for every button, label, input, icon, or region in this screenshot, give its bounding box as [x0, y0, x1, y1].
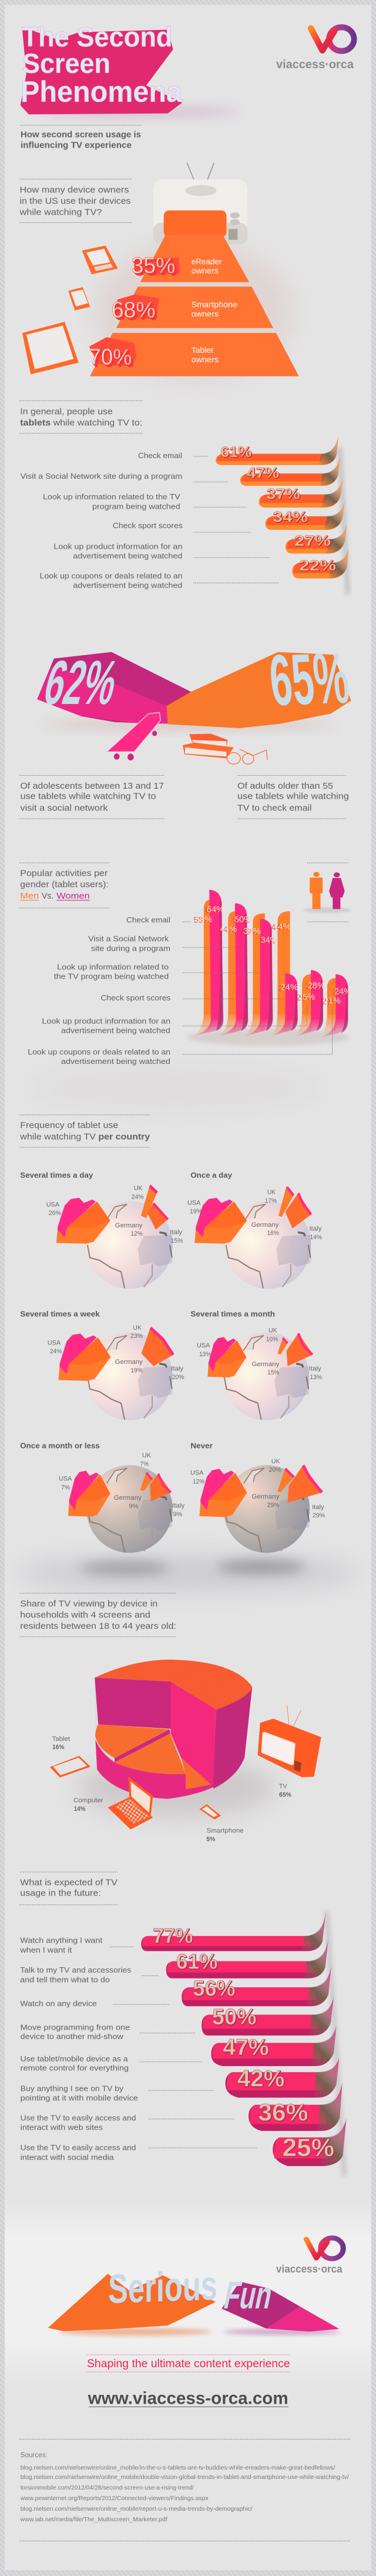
caption: adults: Of adults older than 55	[237, 781, 333, 791]
future usage percentages: 61%	[176, 1949, 217, 1973]
heading: device owners question: How many device owners	[20, 185, 129, 195]
globe panel: several times a day	[20, 1170, 183, 1289]
list: tablet activities: advertisement being watched	[73, 552, 182, 560]
list: future TV usage: and tell them what to do	[20, 1975, 110, 1984]
bar percentages: 47%	[247, 465, 279, 482]
globe panel: never: 20%	[269, 1466, 281, 1473]
heading: share of TV viewing: residents between 18 to 44 years old:	[20, 1621, 176, 1631]
globe panel: several times a week: USA	[48, 1339, 61, 1346]
globe panel: once a month or less	[20, 1441, 185, 1553]
list: gender activities: Look up product information for an	[42, 1016, 170, 1025]
subtitle: influencing TV experience	[21, 141, 132, 151]
globe panel: several times a week: 19%	[130, 1367, 143, 1374]
globe panel: several times a month: 13%	[310, 1374, 322, 1381]
list: tablet activities: Look up product information for an	[53, 542, 182, 551]
icon: books and glasses	[183, 733, 267, 764]
globe panel: never: Germany	[251, 1493, 280, 1500]
bar chart: men vs women	[187, 890, 351, 1046]
globe panel: once a month or less: 7%	[61, 1484, 70, 1491]
list: tablet activities: Look up coupons or deals related to an	[40, 572, 182, 580]
future usage percentages	[153, 1924, 334, 2162]
3D stats: 62% and 65%	[37, 637, 352, 764]
list: gender activities	[28, 915, 171, 1066]
pie walls	[95, 1678, 252, 1799]
list: tablet activities: Check email	[138, 451, 182, 460]
list: gender activities: advertisement being watched	[61, 1057, 170, 1066]
globe panel: once a month or less: USA	[59, 1476, 72, 1483]
title: The Second Screen Phenomena	[21, 21, 183, 114]
heading: activities per gender: gender (tablet users):	[20, 880, 109, 890]
globe panel: once a day: 14%	[310, 1234, 322, 1241]
sources: www.iab.net/media/file/The_Multiscreen_Marketer.pdf	[20, 2516, 167, 2523]
globe panel: several times a month: Several times a month	[190, 1309, 275, 1318]
pie labels	[52, 1736, 291, 1843]
list: gender activities: the TV program being watched	[54, 972, 169, 981]
future usage percentages: 42%	[237, 2066, 284, 2091]
icon: smartphone	[68, 287, 90, 311]
bar percentages by gender: 28%	[308, 981, 325, 991]
list: future TV usage: Talk to my TV and accessories	[20, 1966, 132, 1974]
bar chart: pink ribbons	[141, 1911, 347, 2176]
heading: TV usage in the future	[20, 1878, 118, 1898]
pie labels: 5%	[206, 1836, 215, 1843]
pie labels: 16%	[52, 1744, 65, 1751]
list: future TV usage: Watch anything I want	[20, 1936, 103, 1945]
caption: adults	[237, 781, 349, 813]
bar percentages by gender: 24%	[280, 982, 298, 993]
pyramid labels: Tablet	[192, 345, 213, 355]
bar percentages by gender: 34%	[261, 935, 277, 945]
globe panel: once a day: Italy	[309, 1226, 322, 1233]
heading: tablets while watching TV	[20, 407, 142, 428]
globe panel: several times a week: 23%	[130, 1333, 143, 1340]
globe shadows	[80, 1560, 306, 1575]
caption: adolescents	[20, 781, 164, 813]
list: future TV usage: Watch on any device	[20, 1999, 97, 2008]
pie chart: share of TV viewing	[50, 1660, 321, 1843]
globe panel: once a day: 17%	[265, 1197, 277, 1204]
3D stats: 62% and 65%: 62%	[38, 648, 125, 718]
pie labels: TV	[279, 1783, 287, 1790]
bar percentages by gender: 50%	[234, 915, 251, 925]
future usage percentages: 50%	[212, 2005, 256, 2030]
globe panel: never: USA	[190, 1470, 204, 1477]
bar percentages by gender: 24%	[334, 986, 351, 996]
logo: viaccess-orca top: viaccess·orca	[276, 58, 354, 71]
list: future TV usage: Move programming from one	[21, 2023, 130, 2031]
globe panel: once a month or less: Germany	[114, 1494, 142, 1501]
pyramid labels: Smartphone	[192, 300, 237, 309]
icon: smartphone	[199, 1804, 221, 1820]
sources: Sources:	[21, 2451, 48, 2459]
sources	[20, 2451, 349, 2523]
heading: activities per gender: Women	[56, 891, 90, 901]
bar percentages by gender: 58%	[195, 915, 212, 925]
TV slice 65%	[95, 1660, 252, 1710]
title: The Second Screen Phenomena: The Second	[22, 21, 173, 52]
globe panel: once a day	[187, 1170, 322, 1289]
sources: blog.nielsen.com/nielsenwire/online_mobile/report-u-s-media-trends-by-demographic/	[21, 2505, 253, 2512]
globe panel: once a day: UK	[267, 1189, 276, 1196]
globe panel: several times a month: UK	[268, 1327, 277, 1334]
sources: blog.nielsen.com/nielsenwire/online_mobile/double-vision-global-trends-in-tablet-and-smartphone-use-while-watching-tv/	[21, 2474, 349, 2481]
list: tablet activities: Look up information related to the TV	[43, 492, 180, 501]
bar percentages by gender: 64%	[207, 905, 224, 915]
caption: adults: use tablets while watching	[237, 792, 349, 802]
bar percentages: 22%	[299, 558, 336, 574]
pie labels: Computer	[73, 1797, 103, 1804]
bar percentages	[220, 444, 336, 574]
icon: orange TV	[258, 1705, 321, 1777]
subtitle	[21, 130, 141, 151]
3D slogan: Serious Fun: Fun	[220, 2274, 276, 2317]
tagline: Shaping the ultimate content experience	[87, 2358, 290, 2370]
globe panel: several times a week	[20, 1309, 184, 1420]
icon: tablet	[50, 1756, 90, 1777]
heading: activities per gender	[20, 869, 109, 901]
globe panel: never: 29%	[313, 1512, 325, 1519]
globe panel: several times a month	[190, 1309, 322, 1420]
globe panel: several times a day: UK	[134, 1185, 143, 1192]
future usage percentages: 36%	[258, 2099, 308, 2126]
pyramid chart with TV	[22, 163, 299, 382]
heading: share of TV viewing	[20, 1599, 176, 1631]
globe panel: several times a week: Several times a week	[20, 1309, 100, 1318]
globe panel: once a month or less: 7%	[140, 1460, 149, 1467]
caption: adolescents: Of adolescents between 13 and 17	[20, 781, 164, 791]
list: gender activities: Look up coupons or deals related to an	[28, 1047, 170, 1056]
globe panel: several times a week: UK	[133, 1324, 142, 1332]
globe panel: several times a day: USA	[46, 1201, 60, 1208]
heading: activities per gender: Men	[20, 891, 39, 901]
globe panel: once a day: USA	[187, 1199, 201, 1206]
title: The Second Screen Phenomena: Screen	[22, 48, 110, 79]
heading: tablets while watching TV: tablets while watching TV to:	[20, 418, 142, 428]
bar percentages: 27%	[294, 533, 331, 549]
list: future TV usage: device to another mid-show	[21, 2032, 123, 2041]
heading: tablets while watching TV: In general, people use	[20, 407, 113, 417]
list: future TV usage: interact with web sites	[21, 2123, 103, 2132]
pink wedge	[37, 652, 192, 723]
globe panel: several times a week: Germany	[115, 1359, 143, 1366]
list: gender activities: Check sport scores	[100, 993, 171, 1002]
globe panel: once a day: Once a day	[190, 1170, 233, 1179]
globe panel: several times a month: Italy	[309, 1366, 321, 1373]
bar percentages: 34%	[273, 509, 308, 526]
globe panel: never: Italy	[312, 1504, 324, 1511]
caption: adults: TV to check email	[237, 803, 311, 813]
globe panel: once a month or less: 9%	[129, 1503, 139, 1510]
Tablet slice 16%	[95, 1724, 170, 1758]
globe panel: several times a day: 24%	[132, 1193, 144, 1200]
list: gender activities: Look up information related to	[57, 962, 169, 972]
bar percentages by gender: 25%	[298, 992, 315, 1002]
globe panel: several times a week: 20%	[172, 1374, 184, 1381]
heading: activities per gender: Popular activities per	[20, 869, 108, 879]
pyramid labels: eReader	[192, 256, 222, 266]
heading: frequency per country: while watching TV per country	[19, 1132, 150, 1142]
list: tablet activities: Visit a Social Network site during a program	[21, 472, 182, 481]
heading: share of TV viewing: households with 4 screens and	[20, 1610, 150, 1620]
subtitle: How second screen usage is	[21, 130, 141, 140]
globe panel: once a day: Germany	[251, 1222, 279, 1229]
future usage percentages: 47%	[223, 2035, 269, 2060]
pyramid labels: owners	[192, 355, 219, 364]
Computer slice 14%	[115, 1734, 186, 1774]
pyramid labels: owners	[192, 266, 219, 275]
future usage percentages: 25%	[283, 2134, 334, 2162]
pie labels: Smartphone	[207, 1827, 244, 1834]
caption: adolescents: use tablets while watching TV to	[20, 792, 156, 802]
globe panel: several times a week: 24%	[50, 1348, 62, 1355]
globe panel: several times a day: Germany	[115, 1222, 143, 1229]
pyramid labels: 35%	[132, 253, 175, 278]
globe panel: several times a day: 15%	[171, 1237, 183, 1244]
pyramid labels: owners	[192, 309, 219, 319]
heading: share of TV viewing: Share of TV viewing by device in	[20, 1599, 157, 1609]
icon: eReader	[82, 246, 118, 274]
globe panel: several times a week: Italy	[171, 1366, 184, 1373]
future usage percentages: 77%	[153, 1924, 193, 1947]
sources: torsionmobile.com/2012/04/28/second-screen-use-a-rising-trend/	[21, 2484, 194, 2491]
sources: blog.nielsen.com/nielsenwire/online_mobile/in-the-u-s-tablets-are-tv-buddies-while-ereaders-make-great-bedfellows/	[21, 2464, 335, 2471]
future usage percentages: 56%	[193, 1976, 236, 2000]
heading: TV usage in the future: usage in the future:	[20, 1888, 101, 1898]
list: tablet activities: advertisement being watched	[73, 581, 182, 590]
icon: skateboard	[107, 712, 160, 760]
3D slogan: Serious Fun	[48, 2263, 341, 2335]
bar percentages by gender: 39%	[243, 926, 261, 936]
bar percentages by gender	[195, 905, 351, 1006]
orange wedge	[167, 652, 351, 728]
pyramid labels	[89, 253, 237, 369]
list: gender activities: Check email	[126, 915, 170, 925]
percentage extrusions	[89, 258, 180, 366]
icon: laptop	[108, 1777, 153, 1830]
pyramid tiers	[90, 235, 299, 376]
sources: www.pewinternet.org/Reports/2012/Connected-viewers/Findings.aspx	[20, 2495, 209, 2502]
globe panel: never	[190, 1441, 325, 1553]
bar percentages: 37%	[267, 486, 300, 502]
heading: device owners question: in the US use their devices	[20, 196, 131, 206]
bar percentages by gender: 44%	[273, 922, 291, 932]
heading: frequency per country	[19, 1120, 150, 1142]
logo: viaccess-orca bottom	[276, 2238, 343, 2275]
logo: viaccess-orca bottom: viaccess·orca	[276, 2263, 343, 2275]
list: future TV usage: remote control for everything	[21, 2064, 129, 2073]
pie labels: 14%	[74, 1806, 85, 1813]
globe panel: several times a day: 26%	[49, 1210, 61, 1217]
pie labels: 65%	[279, 1791, 291, 1798]
list: future TV usage: Use the TV to easily access and	[21, 2143, 136, 2152]
3D slogan: Serious Fun: Serious	[108, 2263, 217, 2312]
list: future TV usage: Buy anything I see on TV by	[21, 2084, 124, 2093]
logo: viaccess-orca top	[276, 27, 354, 71]
heading: activities per gender: Vs.	[42, 891, 53, 901]
pie labels: Tablet	[52, 1736, 70, 1743]
globe panel: once a month or less: 9%	[173, 1511, 182, 1518]
heading: TV usage in the future: What is expected of TV	[20, 1878, 118, 1888]
globe panel: several times a month: 15%	[267, 1369, 279, 1376]
list: tablet activities	[21, 451, 183, 590]
list: gender activities: site during a program	[91, 944, 170, 953]
list: future TV usage: interact with social media	[21, 2153, 115, 2161]
globe panel: never: Never	[190, 1441, 213, 1450]
pyramid labels: 70%	[89, 345, 132, 369]
globe panel: several times a day: Italy	[170, 1229, 183, 1236]
globe panel: several times a day: Several times a day	[20, 1170, 93, 1179]
website link: www.viaccess-orca.com	[88, 2388, 288, 2408]
globe panel: once a day: 16%	[267, 1230, 279, 1237]
globe panel: several times a month: USA	[197, 1342, 210, 1349]
globe panel: once a day: 19%	[190, 1208, 202, 1215]
bar percentages: 61%	[220, 444, 251, 461]
globe panel: several times a month: 13%	[199, 1351, 212, 1358]
icon: tablet	[22, 322, 79, 374]
bar chart: orange ribbons	[216, 435, 348, 594]
globe panel: once a month or less: Once a month or less	[20, 1441, 100, 1450]
list: gender activities: advertisement being watched	[61, 1026, 170, 1035]
Smartphone slice 5%	[181, 1757, 211, 1789]
icon: TV	[153, 163, 247, 244]
globe panel: several times a month: 10%	[266, 1336, 278, 1343]
list: future TV usage: Use tablet/mobile device as a	[21, 2054, 129, 2063]
icon: man and woman	[303, 872, 351, 913]
globe panel: never: 29%	[267, 1502, 279, 1509]
heading: device owners question: while watching TV?	[19, 207, 102, 217]
globe panel: never: UK	[271, 1458, 280, 1465]
list: future TV usage: pointing at it with mobile device	[21, 2094, 138, 2103]
list: future TV usage: when I want it	[19, 1946, 72, 1954]
globe panel: once a month or less: Italy	[172, 1502, 185, 1509]
bar percentages by gender: 21%	[324, 996, 341, 1006]
globe panel: never: 12%	[193, 1478, 205, 1485]
list: future TV usage	[19, 1936, 138, 2161]
list: tablet activities: Check sport scores	[113, 521, 183, 530]
heading: device owners question	[19, 185, 131, 217]
list: gender activities: Visit a Social Network	[88, 935, 169, 943]
heading: frequency per country: Frequency of tablet use	[20, 1120, 118, 1130]
list: future TV usage: Use the TV to easily access and	[21, 2114, 136, 2123]
globe panel: once a month or less: UK	[142, 1452, 152, 1459]
bar percentages by gender: 44%	[220, 924, 237, 934]
globe panel: several times a day: 12%	[130, 1230, 143, 1237]
list: tablet activities: program being watched	[92, 502, 180, 510]
pyramid labels: 68%	[112, 298, 155, 323]
globe panel: several times a month: Germany	[251, 1361, 280, 1368]
title: The Second Screen Phenomena: Phenomena	[21, 75, 183, 108]
caption: adolescents: visit a social network	[20, 803, 108, 813]
